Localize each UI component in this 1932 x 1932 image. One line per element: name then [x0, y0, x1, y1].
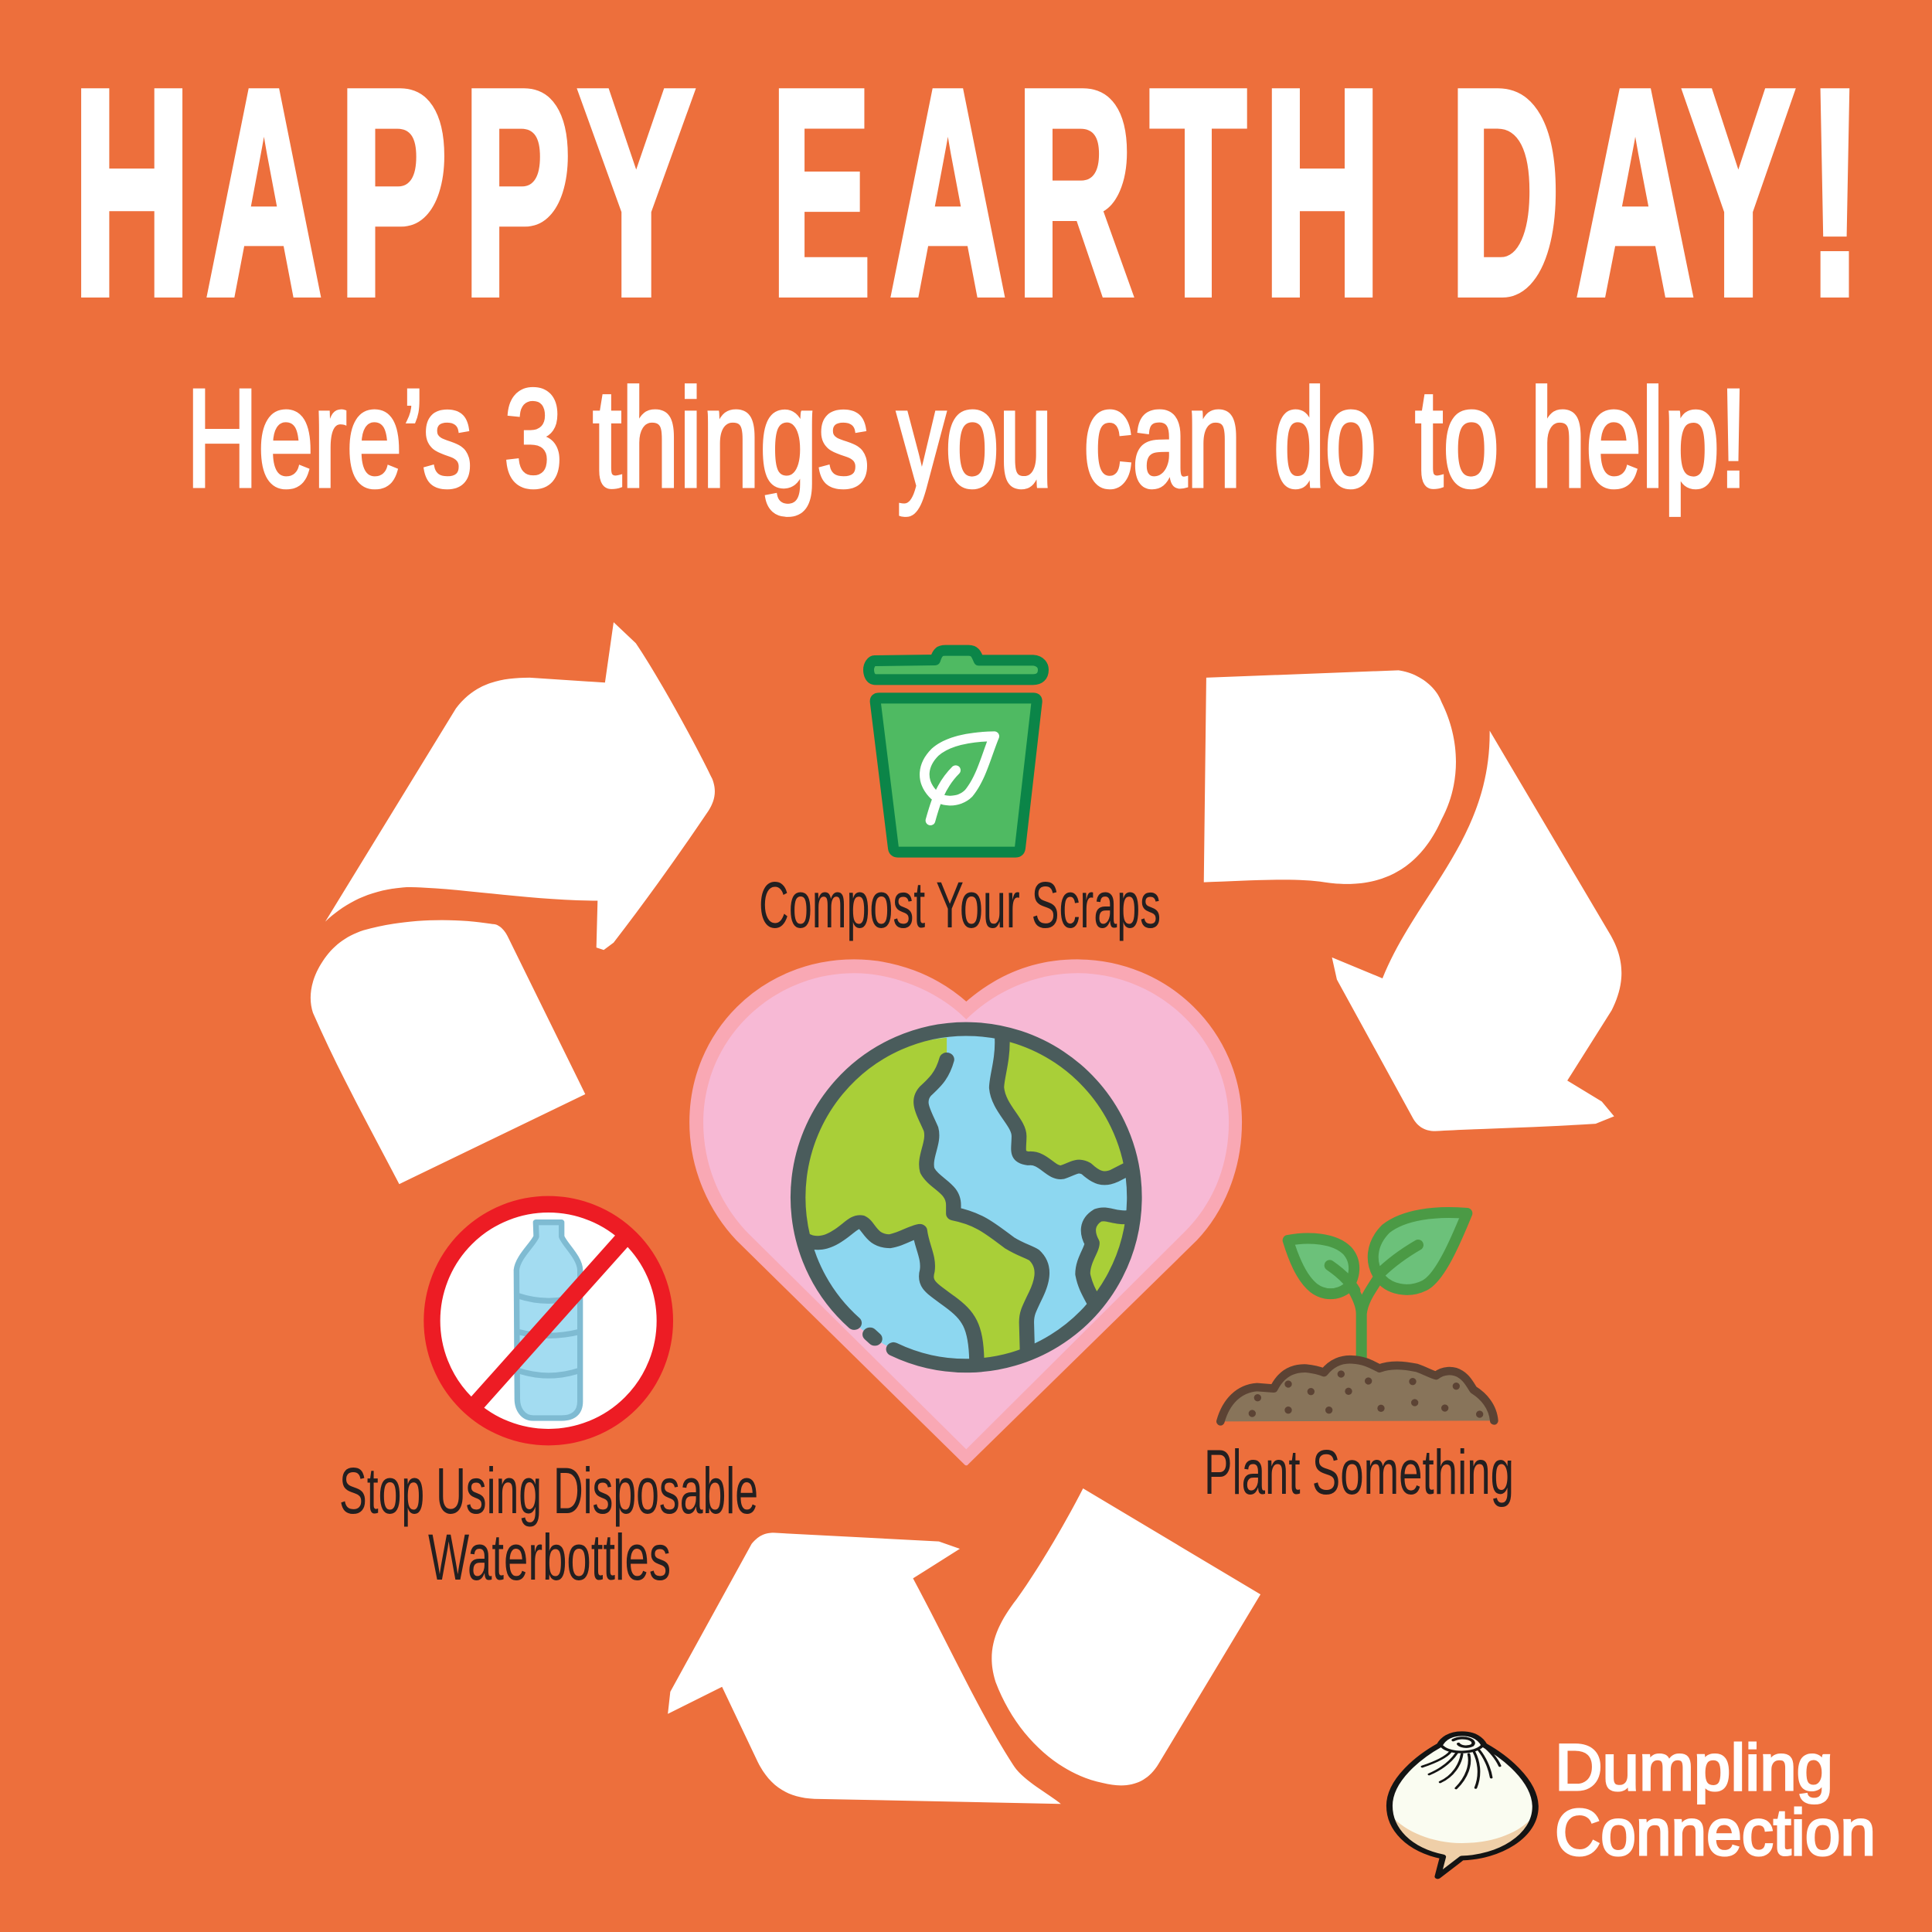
heart with globe — [692, 961, 1240, 1464]
subtitle: can — [1083, 361, 1241, 516]
title: H — [73, 29, 192, 356]
title: T — [1150, 29, 1247, 356]
arrow: top left — [311, 622, 715, 1184]
title: Y — [1682, 29, 1794, 356]
arrow: bottom — [668, 1488, 1260, 1804]
title: P — [463, 29, 571, 356]
white disc with red ring — [432, 1204, 665, 1437]
logo wordmark: Dumpling — [1555, 1731, 1833, 1804]
subtitle: 3 — [504, 361, 563, 516]
subtitle: help! — [1530, 361, 1747, 516]
label: plant: Plant Something — [1204, 1437, 1514, 1508]
heart — [692, 961, 1240, 1464]
logo wordmark — [1555, 1731, 1876, 1869]
bin body — [876, 698, 1037, 852]
leaf — [924, 736, 995, 821]
logo wordmark: Connection — [1555, 1796, 1876, 1869]
subtitle: you — [897, 361, 1053, 516]
title: ! — [1807, 29, 1863, 356]
title: A — [889, 29, 1006, 356]
stem and leaves — [1288, 1213, 1467, 1360]
label: disposable waterbottles: Waterbottles — [428, 1521, 671, 1594]
subtitle: Here’s — [186, 361, 472, 516]
red slash — [477, 1240, 623, 1403]
label: compost: Compost Your Scraps — [759, 869, 1161, 941]
label: disposable waterbottles — [339, 1454, 758, 1594]
bin lid — [869, 651, 1043, 679]
title: Y — [578, 29, 692, 356]
icon: compost bin — [869, 651, 1043, 852]
title: A — [206, 29, 322, 356]
subtitle: things — [593, 361, 869, 516]
title: P — [338, 29, 447, 356]
soil — [1220, 1359, 1494, 1421]
bottle — [516, 1223, 580, 1418]
icon: seedling in soil — [1220, 1213, 1494, 1421]
icon: no plastic bottle — [432, 1204, 665, 1437]
subtitle: to — [1415, 361, 1499, 516]
label: disposable waterbottles: Stop Using Disposable — [339, 1454, 758, 1527]
globe — [798, 1029, 1134, 1366]
subtitle: do — [1274, 361, 1376, 516]
title: A — [1576, 29, 1695, 356]
logo mark: dumpling — [1389, 1733, 1536, 1876]
recycling arrows — [311, 622, 1621, 1804]
title: E — [770, 29, 871, 356]
title: R — [1016, 29, 1134, 356]
arrow: top right — [1204, 670, 1621, 1131]
title: H — [1263, 29, 1382, 356]
title: D — [1450, 29, 1560, 356]
